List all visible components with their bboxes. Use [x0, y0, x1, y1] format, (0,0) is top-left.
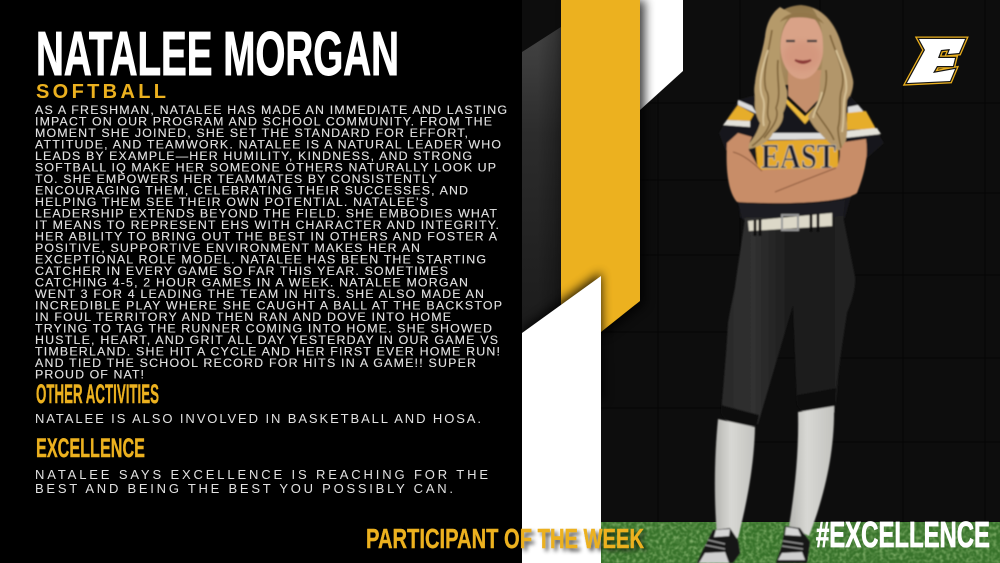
- biography paragraph: MOMENT SHE JOINED, SHE SET THE STANDARD FOR EFFORT,: [35, 126, 468, 140]
- biography paragraph: SOFTBALL IQ MAKE HER SOMEONE OTHERS NATURALLY LOOK UP: [35, 160, 496, 174]
- biography paragraph: ATTITUDE, AND TEAMWORK. NATALEE IS A NATURAL LEADER WHO: [35, 138, 501, 152]
- heading: excellence: EXCELLENCE: [36, 433, 145, 463]
- graphic: top white slanted band: [640, 0, 683, 110]
- chest white stripe: [755, 133, 830, 140]
- left shoe toe: [699, 552, 729, 563]
- left sock: [715, 419, 755, 538]
- jersey waist: [738, 200, 845, 220]
- heading: other activities: OTHER ACTIVITIES: [36, 379, 159, 409]
- biography paragraph: AS A FRESHMAN, NATALEE HAS MADE AN IMMEDIATE AND LASTING: [35, 103, 507, 117]
- logo gold outline: [907, 39, 965, 83]
- biography paragraph: LEADERSHIP EXTENDS BEYOND THE FIELD. SHE EMBODIES WHAT: [35, 206, 497, 220]
- pants hem shadow: [721, 388, 836, 426]
- biography paragraph: CATCHING 4-5, 2 HOUR GAMES IN A WEEK. NATALEE MORGAN: [35, 276, 468, 290]
- biography paragraph: HER ABILITY TO BRING OUT THE BEST IN OTHERS AND FOSTER A: [35, 230, 498, 244]
- cheeks: [783, 41, 821, 71]
- biography paragraph: HUSTLE, HEART, AND GRIT ALL DAY YESTERDAY IN OUR GAME VS: [35, 333, 498, 347]
- right sock: [789, 406, 834, 536]
- right shoe toe: [778, 552, 805, 560]
- left sleeve gold stripe: [727, 105, 754, 121]
- turf strip: [601, 522, 1000, 563]
- arms crossed: [727, 133, 867, 203]
- hair top: [780, 12, 824, 24]
- right sleeve white trim: [848, 105, 867, 116]
- hair right locks: [808, 8, 853, 150]
- biography paragraph: IT MEANS TO REPRESENT EHS WITH CHARACTER AND INTEGRITY.: [35, 218, 499, 232]
- graphic: bottom white slanted band: [522, 276, 601, 563]
- biography paragraph: TRYING TO TAG THE RUNNER COMING INTO HOME. SHE SHOWED: [35, 322, 492, 336]
- biography paragraph: LEADS BY EXAMPLE—HER HUMILITY, KINDNESS, AND STRONG: [35, 149, 472, 163]
- biography paragraph: TIMBERLAND. SHE HIT A CYCLE AND HER FIRST EVER HOME RUN!: [35, 344, 500, 358]
- right sleeve white stripe: [845, 128, 881, 138]
- footer label: participant of the week: PARTICIPANT OF THE WEEK: [366, 523, 644, 554]
- biography paragraph: CATCHER IN EVERY GAME SO FAR THIS YEAR. SOMETIMES: [35, 264, 448, 278]
- belt buckle: [782, 215, 798, 230]
- biography paragraph: ENCOURAGING THEM, CELEBRATING THEIR SUCCESSES, AND: [35, 184, 468, 198]
- right shoe laces: [782, 541, 803, 549]
- hair back: [754, 5, 853, 105]
- chest gold panel: [755, 139, 838, 172]
- hair strands dark: [752, 30, 843, 148]
- biography paragraph: TO. SHE EMPOWERS HER TEAMMATES BY CONSISTENTLY: [35, 172, 437, 186]
- hair strands light: [760, 50, 846, 132]
- eyes: [786, 40, 817, 42]
- left sleeve white trim: [738, 100, 757, 114]
- biography paragraph: WENT 3 FOR 4 LEADING THE TEAM IN HITS. SHE ALSO MADE AN: [35, 287, 484, 301]
- logo dark inline: [907, 39, 965, 83]
- hair left locks: [743, 7, 792, 150]
- left black panel: [0, 0, 522, 563]
- right shoe heel: [785, 527, 801, 536]
- graphic: gold band shadow: [566, 0, 645, 336]
- left shoe: [697, 528, 740, 563]
- footer label shadow: PARTICIPANT OF THE WEEK: [369, 526, 647, 557]
- name heading: NATALEE MORGAN: [36, 20, 399, 89]
- collar: [785, 97, 821, 124]
- excellence quote: BEST AND BEING THE BEST YOU POSSIBLY CAN.: [35, 481, 453, 496]
- jersey lettering outline: EAST: [761, 137, 836, 176]
- left sleeve white stripe: [723, 120, 750, 127]
- jersey: [719, 96, 884, 218]
- player photo illustration: [697, 5, 884, 563]
- biography paragraph: IN FOUL TERRITORY AND THEN RAN AND DOVE INTO HOME: [35, 310, 451, 324]
- logo white letter: [907, 39, 965, 83]
- forearm crease: [733, 152, 836, 192]
- belt: [748, 213, 832, 231]
- graphic: bottom white band shadow: [522, 272, 604, 400]
- face: [780, 13, 824, 79]
- left shoe heel: [714, 529, 730, 537]
- biography paragraph: INCREDIBLE PLAY WHERE SHE CAUGHT A BALL AT THE BACKSTOP: [35, 298, 502, 312]
- biography paragraph: [35, 103, 507, 382]
- other activities text: NATALEE IS ALSO INVOLVED IN BASKETBALL AND HOSA.: [35, 411, 481, 426]
- belt loops: [755, 214, 818, 236]
- excellence quote: [35, 467, 488, 496]
- sport subtitle: SOFTBALL: [36, 81, 166, 103]
- logo: East E: [907, 39, 965, 83]
- neck and chest skin: [788, 70, 822, 113]
- biography paragraph: EXCEPTIONAL ROLE MODEL. NATALEE HAS BEEN THE STARTING: [35, 252, 486, 266]
- dark padded wall background: [522, 0, 1000, 523]
- mouth: [795, 60, 811, 63]
- right shoe: [776, 526, 810, 563]
- biography paragraph: HELPING THEM SEE THEIR OWN POTENTIAL. NATALEE’S: [35, 195, 428, 209]
- graphic: dark grey slanted band: [522, 27, 561, 334]
- biography paragraph: POSITIVE, SUPPORTIVE ENVIRONMENT MAKES HER AN: [35, 241, 420, 255]
- excellence quote: NATALEE SAYS EXCELLENCE IS REACHING FOR THE: [35, 467, 488, 482]
- left shoe laces: [705, 540, 725, 549]
- biography paragraph: AND TIED THE SCHOOL RECORD FOR HITS IN A GAME!! SUPER: [35, 356, 476, 370]
- biography paragraph: IMPACT ON OUR PROGRAM AND SCHOOL COMMUNITY. FROM THE: [35, 114, 492, 128]
- graphic: gold slanted band: [561, 0, 640, 332]
- right sleeve gold stripe: [847, 111, 876, 130]
- pants: [721, 216, 855, 426]
- biography paragraph: PROUD OF NAT!: [35, 368, 144, 382]
